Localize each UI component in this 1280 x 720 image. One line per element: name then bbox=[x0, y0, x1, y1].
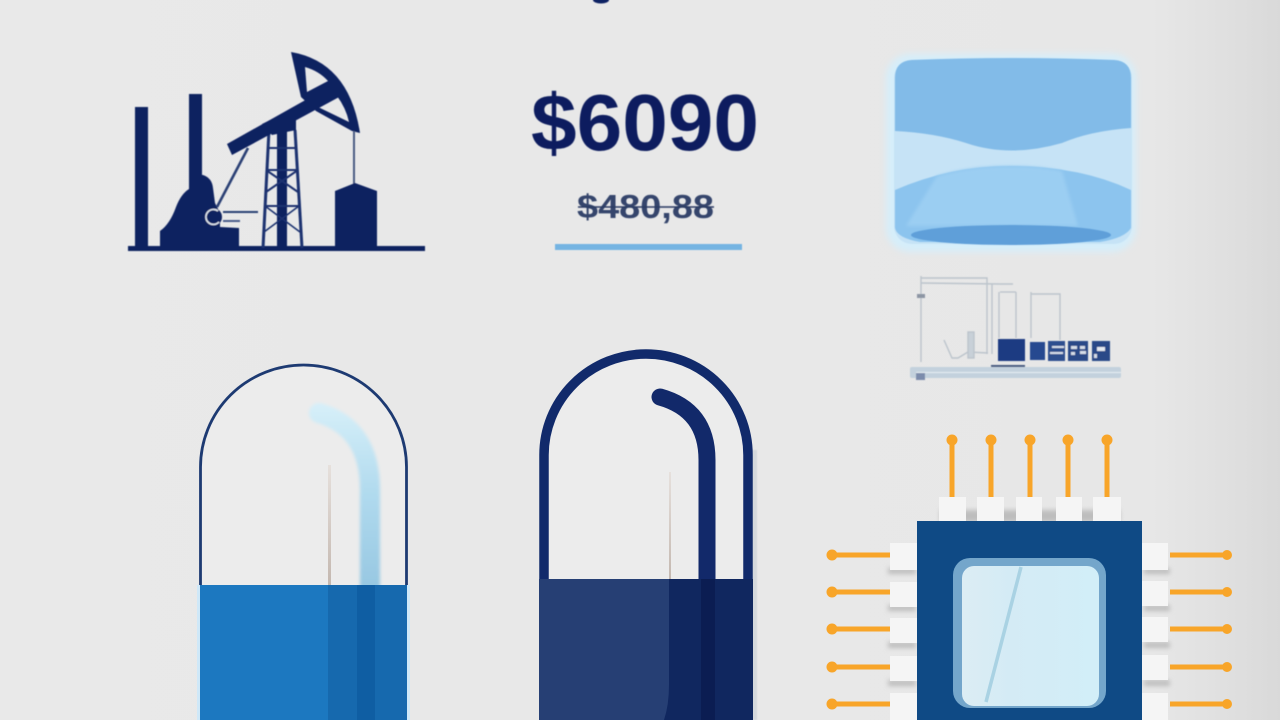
lens upper band bbox=[895, 58, 1131, 150]
flywheel bbox=[204, 208, 258, 226]
chip window glass bbox=[962, 566, 1099, 706]
capsule 1 thin line bbox=[328, 465, 331, 585]
chip window frame bbox=[953, 558, 1106, 708]
capsule 2 liquid bbox=[539, 579, 753, 720]
white pads bbox=[890, 497, 1168, 720]
chip body bbox=[917, 521, 1142, 720]
derrick tower bbox=[263, 125, 302, 248]
capsule 2 thin line bbox=[669, 472, 671, 580]
horsehead bbox=[291, 52, 360, 133]
polished rod bbox=[353, 131, 355, 184]
capsule 2 outline bbox=[544, 354, 748, 582]
lens middle bbox=[894, 60, 1132, 244]
capsule 2 hook bbox=[660, 397, 707, 585]
capsule gauge: blue bbox=[197, 364, 410, 720]
struck price: $480,88 bbox=[577, 188, 714, 225]
plant piping bbox=[917, 276, 1060, 362]
capsule 1 interior bbox=[201, 364, 406, 590]
capsule 1 highlight arc bbox=[319, 413, 370, 586]
top orange leads bbox=[949, 437, 1110, 497]
ground line bbox=[128, 246, 425, 251]
capsule 1 liquid bbox=[197, 585, 410, 720]
chip window streak bbox=[986, 567, 1021, 702]
lens lower highlight bbox=[906, 166, 1078, 226]
icon: oil pump jack bbox=[128, 52, 425, 251]
capsule 2 shadow bbox=[750, 450, 757, 720]
icon: blue glass lens bbox=[886, 54, 1136, 252]
title fragment cut off at top bbox=[593, 0, 609, 4]
right orange leads bbox=[1170, 552, 1230, 706]
lens base ellipse bbox=[911, 225, 1111, 245]
big price: $6090 bbox=[531, 78, 759, 167]
lens lower band bbox=[895, 166, 1131, 242]
chip pin shadows bbox=[888, 510, 1170, 686]
engine mound bbox=[160, 174, 239, 248]
icon: microchip bbox=[829, 437, 1230, 720]
control blocks bbox=[998, 339, 1025, 361]
left chimney bbox=[135, 107, 148, 248]
capsule 2 interior bbox=[544, 354, 748, 582]
icon: small industrial plant bbox=[910, 276, 1121, 380]
walking beam bbox=[227, 84, 341, 155]
left orange leads bbox=[829, 552, 890, 707]
lens glow bbox=[886, 54, 1136, 252]
accent underline bbox=[555, 244, 742, 250]
capsule gauge: navy bbox=[539, 354, 757, 720]
storage tank bbox=[335, 183, 377, 248]
second chimney bbox=[189, 94, 202, 184]
connecting rod bbox=[217, 148, 248, 207]
plant base bbox=[910, 367, 1121, 378]
capsule 1 outline bbox=[200, 365, 406, 586]
